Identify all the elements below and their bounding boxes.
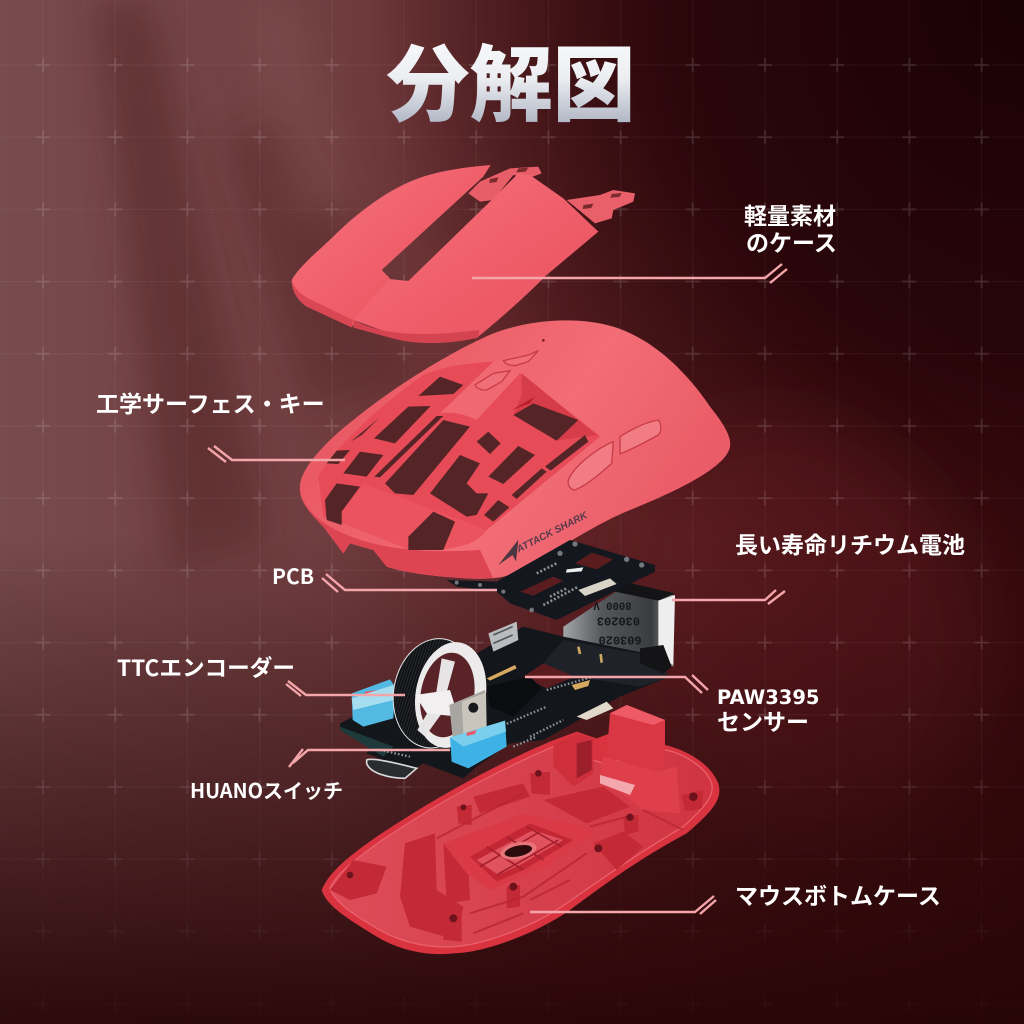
ribs xyxy=(437,793,683,933)
right half xyxy=(353,173,598,341)
encoder xyxy=(449,690,487,738)
mouse upper body xyxy=(300,320,730,579)
leader: lightweight case xyxy=(472,264,787,283)
leader: PAW3395 xyxy=(525,675,708,693)
label: lightweight case xyxy=(744,197,837,258)
mouse upper body: ATTACK SHARK xyxy=(514,510,590,556)
battery: 030203 xyxy=(597,613,640,627)
label: lightweight case: 軽量素材 xyxy=(744,197,836,231)
inner frame xyxy=(318,362,600,550)
label: bottom case: マウスボトムケース xyxy=(735,877,941,911)
label: PAW3395 sensor xyxy=(717,686,820,737)
leader: PCB xyxy=(322,574,497,592)
battery: 603020 xyxy=(599,633,642,647)
label: HUANO switch: HUANOスイッチ xyxy=(190,775,343,804)
label: TTC encoder: TTCエンコーダー xyxy=(117,650,295,683)
label: optical surface key: 工学サーフェス・キー xyxy=(96,385,325,419)
window holes xyxy=(325,377,588,550)
blue switch left xyxy=(352,679,395,727)
scroll wheel and switches xyxy=(352,632,507,768)
leader lines xyxy=(208,264,787,914)
top shell xyxy=(292,165,635,343)
top buttons xyxy=(475,371,510,390)
leader: HUANO switch xyxy=(289,749,450,767)
leader: TTC encoder xyxy=(286,681,405,696)
upper PCB xyxy=(447,540,655,620)
label: PCB: PCB xyxy=(272,561,314,591)
side wall behind frame xyxy=(513,373,597,441)
tall block xyxy=(607,705,665,772)
wheel xyxy=(385,632,485,755)
label: lightweight case: のケース xyxy=(746,224,837,258)
leader: optical surface key xyxy=(208,446,345,462)
chip xyxy=(487,677,542,717)
main PCB xyxy=(340,622,672,778)
tabs xyxy=(468,167,542,202)
battery: 8000 V xyxy=(593,599,632,611)
label: PAW3395 sensor: センサー xyxy=(717,703,809,737)
key strip xyxy=(440,340,563,420)
left half xyxy=(292,165,491,327)
leader: bottom case xyxy=(530,896,716,914)
title: 分解図 xyxy=(386,18,636,138)
central sensor cradle xyxy=(443,813,593,890)
blue switch right xyxy=(450,721,507,768)
bottom case xyxy=(322,705,719,954)
leader: battery xyxy=(672,590,785,604)
battery xyxy=(563,580,675,667)
label: battery: 長い寿命リチウム電池 xyxy=(735,526,965,560)
label: PAW3395 sensor: PAW3395 xyxy=(717,686,820,709)
logo xyxy=(498,540,518,565)
bosses and inner walls xyxy=(330,772,703,942)
USB connector top xyxy=(488,622,518,652)
side buttons xyxy=(568,442,613,490)
